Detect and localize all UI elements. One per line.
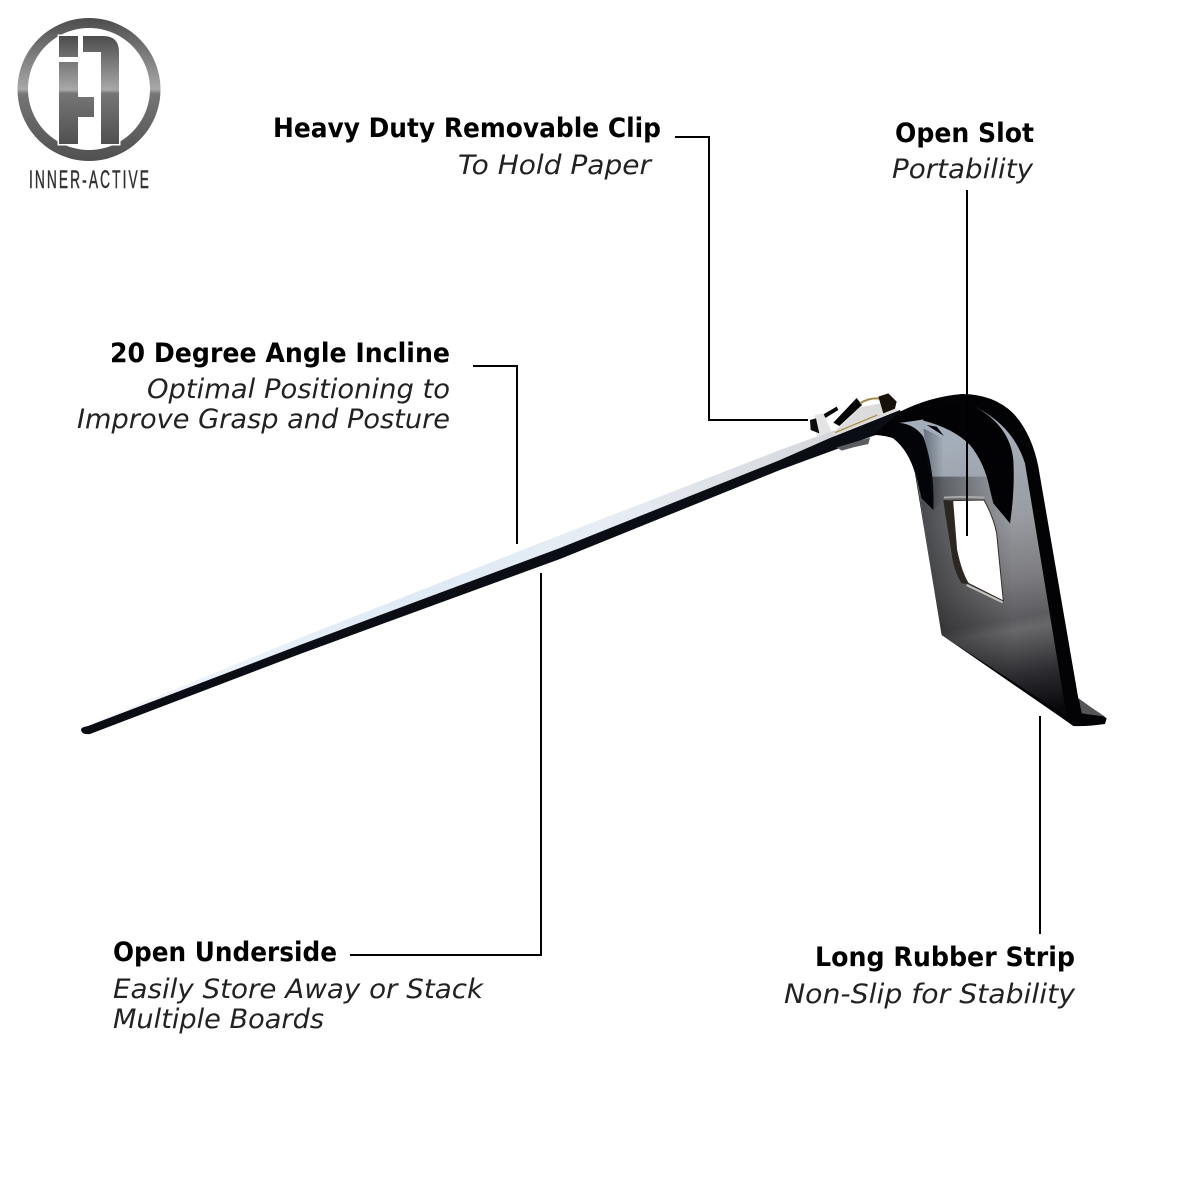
logo ring: [18, 18, 161, 161]
clip pivot: [878, 393, 897, 413]
stand inner face: [895, 408, 1067, 717]
clip dark lever: [833, 398, 862, 426]
leader line: [473, 366, 517, 544]
rubber foot: [1079, 699, 1105, 717]
heading: Open Slot: [895, 118, 1034, 149]
arch slit: [927, 425, 944, 436]
description line 2: Improve Grasp and Posture: [77, 404, 450, 435]
logo: Inner-Active: [18, 18, 161, 194]
clip catch silver: [813, 413, 832, 436]
callout: 20 degree angle incline: [77, 338, 517, 544]
callout: long rubber strip: [784, 716, 1076, 1010]
stand outer shell: [873, 394, 1107, 726]
leader line inside slot: [966, 497, 968, 536]
logo monogram: [59, 36, 119, 144]
clip small bar: [823, 407, 838, 418]
stand left fin glow: [923, 428, 945, 510]
description: Portability: [892, 154, 1034, 185]
description: Easily Store Away or Stack: [113, 974, 484, 1005]
callout: heavy duty removable clip: [273, 113, 808, 420]
open slot: [953, 500, 1003, 601]
leader line: [1039, 716, 1041, 934]
heading: Heavy Duty Removable Clip: [273, 113, 661, 144]
clip plate: [833, 403, 898, 436]
clip: [810, 393, 898, 451]
heading: Long Rubber Strip: [815, 942, 1075, 973]
leader line: [350, 573, 541, 955]
board top highlight: [90, 430, 835, 724]
logo wordmark: INNER-ACTIVE: [29, 167, 149, 194]
stand face side shading: [917, 477, 1067, 717]
description: Non-Slip for Stability: [784, 979, 1076, 1010]
stand left fin: [893, 423, 934, 510]
heading: 20 Degree Angle Incline: [110, 338, 450, 369]
slot wall: [943, 500, 969, 584]
heading: Open Underside: [113, 937, 337, 968]
callout: open underside: [113, 573, 541, 1035]
slot weld: [944, 494, 984, 501]
slant board product: [81, 393, 1107, 734]
description line 2: Multiple Boards: [113, 1004, 324, 1035]
clip underside bolts: [837, 438, 870, 451]
callout: open slot: [892, 118, 1034, 536]
description: Optimal Positioning to: [147, 374, 450, 405]
stand, drawn in 3x crop coordinates: [810, 393, 1107, 726]
description: To Hold Paper: [458, 150, 653, 181]
leader line: [966, 190, 968, 497]
board edge: [81, 410, 905, 734]
slot lower lip: [967, 585, 1003, 602]
clip ring: [860, 398, 887, 403]
stand top shadow and right fin: [922, 405, 1014, 523]
leader line: [675, 137, 808, 420]
clip gold edge: [835, 415, 877, 433]
clip catch black: [810, 418, 819, 433]
